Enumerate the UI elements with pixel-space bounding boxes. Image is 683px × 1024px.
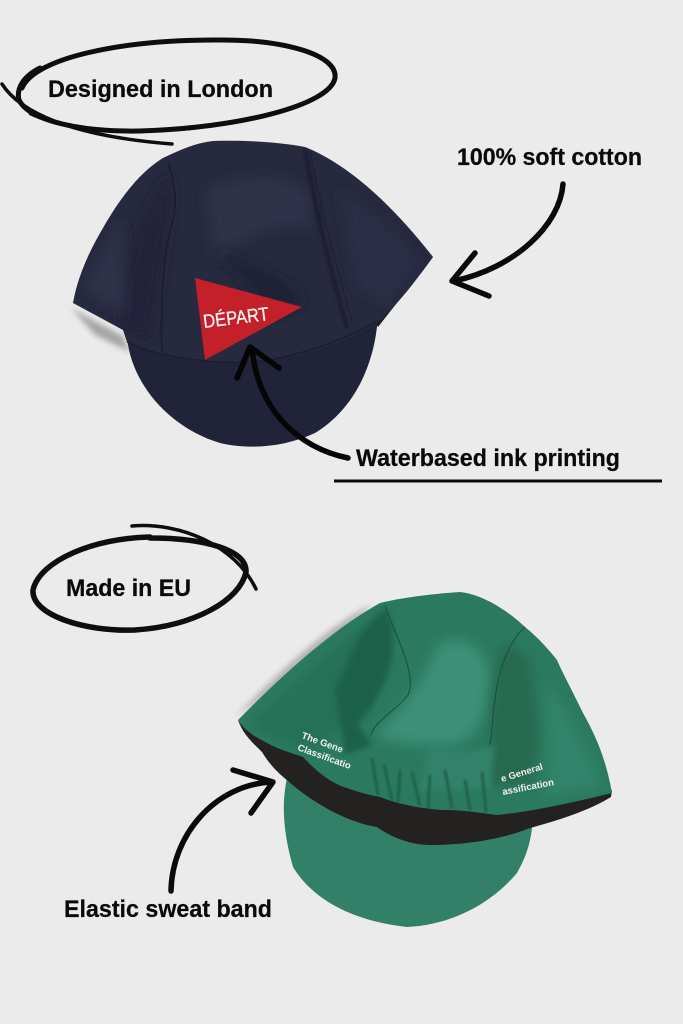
- black sweat band: [238, 720, 612, 845]
- label: waterbased ink: Waterbased ink printing: [356, 445, 620, 472]
- crown seam: [371, 605, 525, 745]
- arrow: waterbased ink: [237, 347, 348, 458]
- brim: [127, 315, 378, 447]
- inner sweat band: [360, 255, 433, 327]
- label: designed in London: Designed in London: [48, 76, 273, 103]
- gathered elastic pleats: [372, 758, 486, 812]
- crown: [238, 592, 612, 815]
- cap print right: [500, 762, 555, 798]
- crown folds: [84, 150, 420, 352]
- label: elastic sweat band: Elastic sweat band: [64, 896, 272, 923]
- label: soft cotton: 100% soft cotton: [457, 144, 642, 171]
- crown: [73, 141, 433, 362]
- cap print right: assification: [501, 777, 555, 798]
- label: made in EU: Made in EU: [66, 575, 191, 602]
- cap print right: e General: [500, 762, 544, 785]
- soft shadow: [236, 604, 372, 716]
- arrow: soft cotton: [452, 184, 563, 296]
- red pennant logo: [195, 278, 302, 360]
- pennant text: DÉPART: [202, 304, 270, 333]
- oval: made in EU: [33, 526, 256, 630]
- cap print left: The Gene: [300, 730, 344, 756]
- brim: [284, 770, 533, 927]
- cap shadow: [71, 308, 130, 352]
- navy cap photo: [71, 141, 433, 447]
- arrow: elastic sweat band: [171, 770, 273, 891]
- underline: [334, 480, 662, 482]
- green cap photo: [236, 592, 612, 927]
- oval: designed in London: [2, 40, 335, 144]
- brim seam: [127, 320, 378, 362]
- cap print left: Classificatio: [296, 742, 353, 772]
- crown folds: [250, 608, 600, 795]
